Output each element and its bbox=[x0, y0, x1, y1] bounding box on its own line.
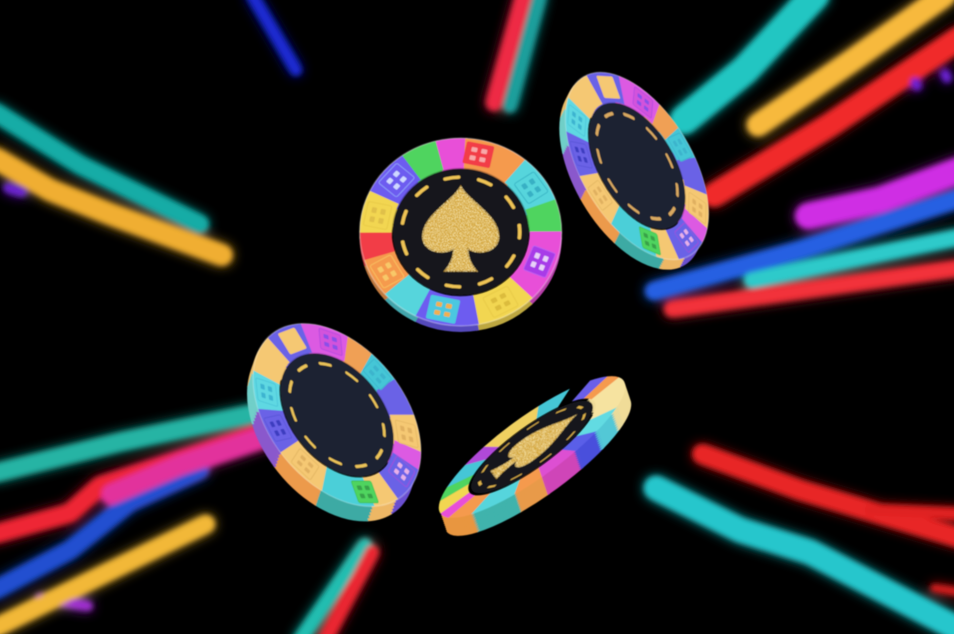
streak: red top bbox=[494, 0, 524, 103]
streak: blue left lower bbox=[0, 470, 200, 590]
chip center disc bbox=[393, 169, 529, 295]
chip edge bbox=[340, 126, 581, 350]
streak: cyan top right bbox=[684, 0, 815, 120]
tile: yellow bbox=[483, 286, 519, 318]
streak: red right bbox=[672, 268, 954, 309]
streak: magenta right bbox=[808, 170, 954, 216]
dashed inner ring bbox=[388, 165, 533, 299]
chip edge bbox=[192, 272, 474, 576]
streak: blue top bbox=[252, 0, 296, 70]
streak: magenta small bbox=[40, 598, 88, 606]
tile: violet bbox=[378, 163, 415, 197]
tile: pale yellow bbox=[363, 201, 392, 230]
streak: red upper right bbox=[714, 38, 954, 195]
tile: cyan with orange marks bbox=[426, 295, 460, 324]
gold spade bbox=[423, 186, 499, 271]
chip face bbox=[502, 9, 772, 323]
chip face bbox=[402, 339, 662, 555]
streak: red bottom bbox=[325, 552, 372, 634]
streak: teal bottom bbox=[300, 545, 365, 634]
streak: red lower right branch bbox=[870, 510, 954, 514]
streak: yellow lower left bbox=[0, 524, 206, 628]
streak: cyan lower right bbox=[656, 488, 954, 630]
chip: lower left, tilted bbox=[192, 269, 476, 576]
tile: red bbox=[462, 141, 495, 168]
rim highlight bbox=[360, 138, 562, 326]
chip: upper right, tilted bbox=[502, 9, 772, 323]
streak: yellow top right bbox=[758, 0, 945, 125]
tile: magenta bbox=[523, 245, 556, 278]
chip edge bbox=[511, 29, 755, 315]
streak: red corner bbox=[934, 588, 954, 592]
streak: red lower right bbox=[702, 454, 954, 538]
chip: lower right, nearly edge-on bbox=[402, 339, 667, 573]
streak: teal left lower bbox=[0, 414, 252, 473]
chip face bbox=[340, 120, 581, 344]
streak: teal right bbox=[752, 237, 954, 280]
chip face bbox=[198, 269, 476, 561]
tile: orange bbox=[370, 255, 404, 288]
streak: teal left upper bbox=[0, 112, 200, 224]
streak: teal top bbox=[510, 0, 540, 106]
streak: red left lower bbox=[0, 432, 262, 534]
tile: cyan bbox=[514, 172, 548, 204]
streak: magenta left lower bbox=[112, 436, 266, 494]
chip: center, spade face bbox=[340, 120, 581, 350]
chip edge bbox=[403, 341, 667, 573]
streak: purple specks bbox=[8, 74, 947, 192]
streak: yellow left upper bbox=[0, 158, 222, 255]
streak: blue right bbox=[654, 198, 954, 291]
